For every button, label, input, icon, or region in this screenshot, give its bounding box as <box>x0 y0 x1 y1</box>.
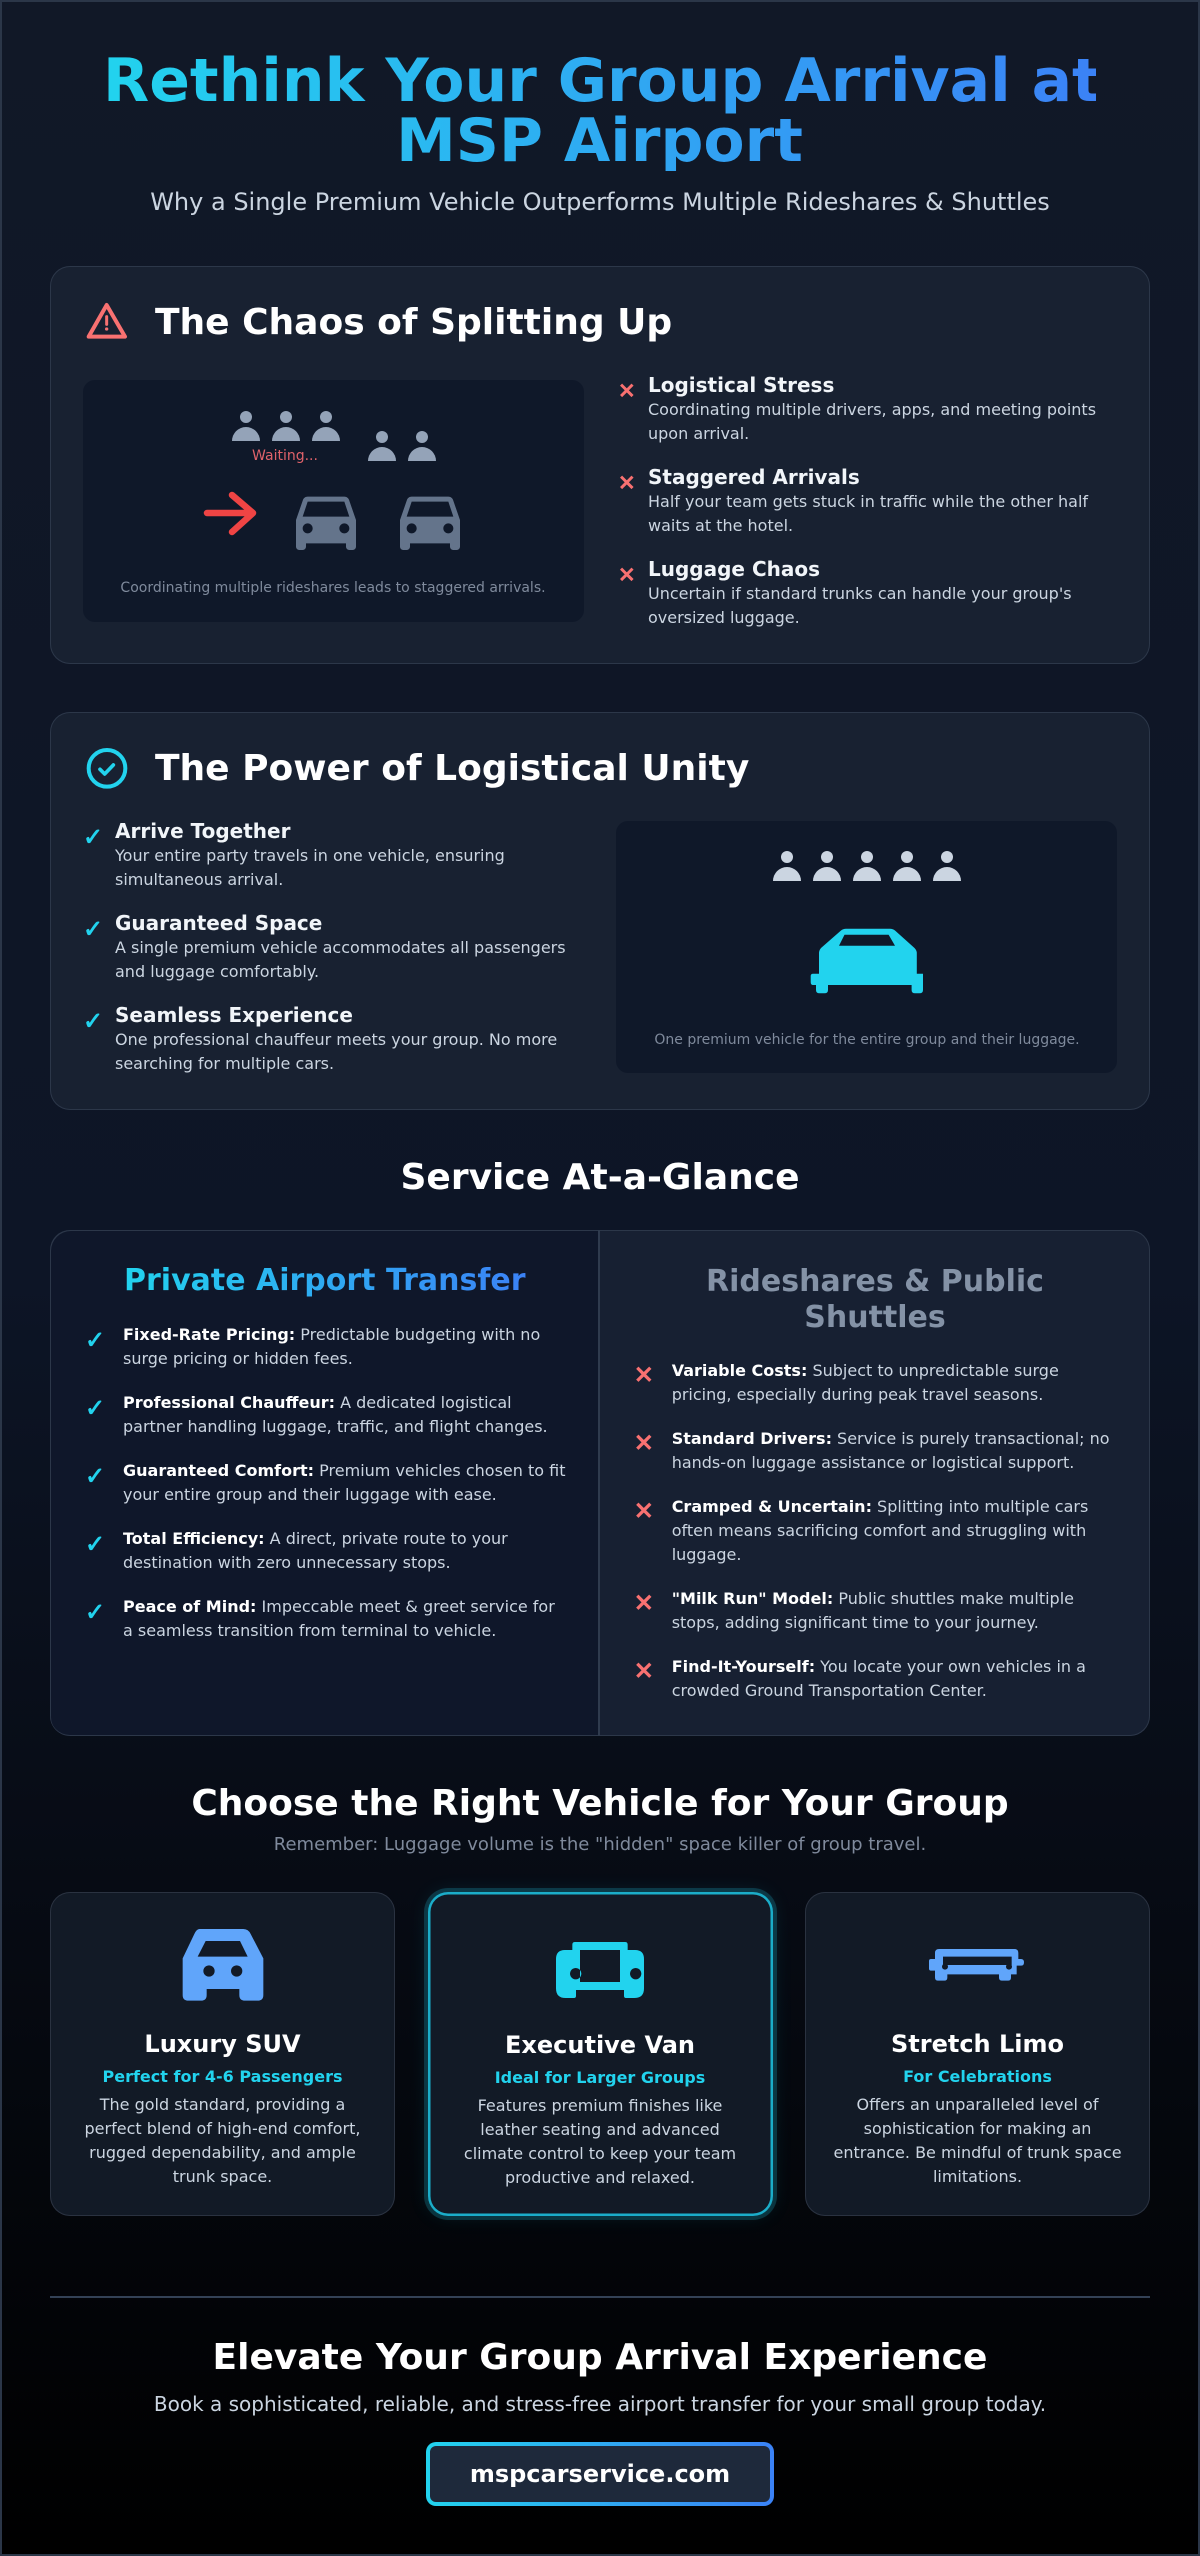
item: seamless experience <box>83 1003 557 1073</box>
heading: elevate your group arrival experience: Elevate Your Group Arrival Experience <box>213 2336 987 2378</box>
vehicle description: leather seating and advanced <box>480 2120 720 2139</box>
icon: suv <box>182 1929 264 2001</box>
row: peace of mind: a seamless transition from terminal to vehicle. <box>123 1620 496 1640</box>
item: staggered arrivals <box>618 465 1088 535</box>
vehicle description: entrance. Be mindful of trunk space <box>833 2143 1122 2162</box>
column: rideshares and public shuttles <box>634 1264 1110 1700</box>
vehicle description: Offers an unparalleled level of <box>857 2095 1098 2114</box>
row: peace of mind <box>85 1596 555 1640</box>
item: luggage chaos: Luggage Chaos <box>648 557 820 581</box>
vehicle description <box>464 2096 736 2187</box>
item: guaranteed space: A single premium vehicle accommodates all passengers <box>115 938 566 957</box>
row: fixed-rate pricing: surge pricing or hidden fees. <box>123 1348 353 1368</box>
subheading: luggage reminder: Remember: Luggage volume is the "hidden" space killer of group travel. <box>274 1834 926 1855</box>
item: staggered arrivals: Half your team gets stuck in traffic while the other half <box>648 492 1088 511</box>
item: luggage chaos <box>618 557 1072 627</box>
vehicle description: The gold standard, providing a <box>100 2095 345 2114</box>
panel: the chaos of splitting up: ✕ <box>618 471 636 495</box>
vehicle description: trunk space. <box>173 2167 272 2186</box>
column: private airport transfer: ✓ <box>85 1530 105 1558</box>
row: cramped and uncertain: Cramped & Uncertain: Splitting into multiple cars <box>672 1496 1088 1516</box>
row: variable costs: pricing, especially during peak travel seasons. <box>672 1384 1043 1404</box>
item: staggered arrivals: Staggered Arrivals <box>648 465 860 489</box>
title <box>103 51 1096 171</box>
heading: unity: The Power of Logistical Unity <box>155 748 749 788</box>
row: find-it-yourself <box>634 1656 1086 1700</box>
column heading: rideshares <box>706 1264 1044 1335</box>
illustration: one premium vehicle <box>616 821 1117 1073</box>
item: seamless experience: searching for multiple cars. <box>115 1054 334 1073</box>
vehicle name: Executive Van <box>505 2031 695 2059</box>
card: luxury suv <box>50 1892 395 2216</box>
footer text: Book a sophisticated, reliable, and stress-free airport transfer for your small group today. <box>154 2392 1046 2416</box>
panel: the chaos of splitting up: ✕ <box>618 379 636 403</box>
row: standard drivers <box>634 1428 1110 1472</box>
vehicle description: perfect blend of high-end comfort, <box>85 2119 360 2138</box>
row: variable costs: Variable Costs: Subject to unpredictable surge <box>672 1360 1059 1380</box>
call to action button <box>426 2442 774 2506</box>
icon: limo <box>929 1949 1024 1981</box>
row: guaranteed comfort <box>85 1460 566 1504</box>
item: guaranteed space <box>83 911 566 981</box>
icon: van <box>556 1942 644 1998</box>
row: milk run model <box>634 1588 1074 1632</box>
row: cramped and uncertain <box>634 1496 1088 1564</box>
item: luggage chaos: Uncertain if standard trunks can handle your group's <box>648 584 1072 603</box>
panel: the power of logistical unity: ✓ <box>83 915 103 943</box>
row: professional chauffeur <box>85 1392 548 1436</box>
panel: the chaos of splitting up <box>50 266 1150 664</box>
footer divider <box>50 2296 1150 2298</box>
item: seamless experience: One professional chauffeur meets your group. No more <box>115 1030 557 1049</box>
row: variable costs <box>634 1360 1059 1404</box>
vehicle description <box>85 2095 360 2186</box>
item: seamless experience: Seamless Experience <box>115 1003 353 1027</box>
panel: the chaos of splitting up: ✕ <box>618 563 636 587</box>
row: total efficiency: destination with zero unnecessary stops. <box>123 1552 451 1572</box>
column heading: rideshares: Shuttles <box>804 1300 946 1335</box>
column: rideshares and public shuttles: ✕ <box>634 1588 654 1616</box>
item: logistical stress: Logistical Stress <box>648 373 834 397</box>
heading: choose the right vehicle: Choose the Right Vehicle for Your Group <box>191 1782 1009 1824</box>
column heading: rideshares: Rideshares & Public <box>706 1264 1044 1299</box>
row: guaranteed comfort: your entire group and their luggage with ease. <box>123 1484 497 1504</box>
item: staggered arrivals: waits at the hotel. <box>648 516 793 535</box>
card: executive van <box>428 1892 772 2216</box>
row: milk run model: stops, adding significant time to your journey. <box>672 1612 1039 1632</box>
row: standard drivers: hands-on luggage assistance or logistical support. <box>672 1452 1074 1472</box>
heading: service at-a-glance: Service At-a-Glance <box>400 1156 800 1198</box>
card: stretch limo <box>805 1892 1150 2216</box>
item: logistical stress <box>618 373 1096 443</box>
vehicle description: sophistication for making an <box>864 2119 1091 2138</box>
row: guaranteed comfort: Guaranteed Comfort: Premium vehicles chosen to fit <box>123 1460 565 1480</box>
panel: the power of logistical unity: ✓ <box>83 1007 103 1035</box>
column: rideshares and public shuttles: ✕ <box>634 1360 654 1388</box>
row: cramped and uncertain: often means sacrificing comfort and struggling with <box>672 1520 1086 1540</box>
item: luggage chaos: oversized luggage. <box>648 608 800 627</box>
row: peace of mind: Peace of Mind: Impeccable meet & greet service for <box>123 1596 555 1616</box>
column: private airport transfer: ✓ <box>85 1326 105 1354</box>
vehicle name: Luxury SUV <box>144 2030 301 2058</box>
item: arrive together <box>83 819 505 889</box>
column: private airport transfer: ✓ <box>85 1394 105 1422</box>
panel: the power of logistical unity <box>50 712 1150 1110</box>
row: fixed-rate pricing: Fixed-Rate Pricing: Predictable budgeting with no <box>123 1324 540 1344</box>
icon: warning triangle <box>86 302 128 339</box>
row: milk run model: "Milk Run" Model: Public shuttles make multiple <box>672 1588 1074 1608</box>
icon: check circle <box>86 748 128 789</box>
vehicle description <box>833 2095 1122 2186</box>
row: professional chauffeur: Professional Chauffeur: A dedicated logistical <box>123 1392 512 1412</box>
row: cramped and uncertain: luggage. <box>672 1544 741 1564</box>
vehicle description: limitations. <box>933 2167 1022 2186</box>
column: rideshares and public shuttles: ✕ <box>634 1496 654 1524</box>
column: private airport transfer: ✓ <box>85 1598 105 1626</box>
column: rideshares and public shuttles: ✕ <box>634 1656 654 1684</box>
row: standard drivers: Standard Drivers: Service is purely transactional; no <box>672 1428 1110 1448</box>
row: total efficiency <box>85 1528 508 1572</box>
item: logistical stress: upon arrival. <box>648 424 749 443</box>
column: private airport transfer: ✓ <box>85 1462 105 1490</box>
vehicle description: Features premium finishes like <box>478 2096 722 2115</box>
illustration: multiple rideshares: Coordinating multiple rideshares leads to staggered arrivals. <box>120 580 546 596</box>
item: guaranteed space: Guaranteed Space <box>115 911 322 935</box>
row: find-it-yourself: Find-It-Yourself: You locate your own vehicles in a <box>672 1656 1086 1676</box>
item: logistical stress: Coordinating multiple drivers, apps, and meeting points <box>648 400 1096 419</box>
column: rideshares and public shuttles: ✕ <box>634 1428 654 1456</box>
item: arrive together: Your entire party travels in one vehicle, ensuring <box>115 846 505 865</box>
row: fixed-rate pricing <box>85 1324 540 1368</box>
panel: the power of logistical unity: ✓ <box>83 823 103 851</box>
title: MSP Airport <box>396 106 803 176</box>
vehicle tag: For Celebrations <box>903 2066 1052 2086</box>
illustration: multiple rideshares <box>83 380 584 622</box>
row: total efficiency: Total Efficiency: A direct, private route to your <box>123 1528 508 1548</box>
title: Rethink Your Group Arrival at <box>103 46 1101 116</box>
illustration: one premium vehicle: One premium vehicle for the entire group and their luggage. <box>654 1032 1080 1048</box>
call to action button: mspcarservice.com <box>470 2460 730 2488</box>
heading: chaos: The Chaos of Splitting Up <box>155 302 672 342</box>
row: find-it-yourself: crowded Ground Transportation Center. <box>672 1680 987 1700</box>
item: arrive together: Arrive Together <box>115 819 290 843</box>
column heading: private airport transfer: Private Airport Transfer <box>124 1263 526 1298</box>
column: private airport transfer <box>50 1230 600 1736</box>
item: guaranteed space: and luggage comfortably. <box>115 962 319 981</box>
vehicle name: Stretch Limo <box>891 2030 1064 2058</box>
illustration: multiple rideshares: Waiting... <box>252 448 318 464</box>
comparison table <box>50 1230 1150 1736</box>
vehicle tag: Ideal for Larger Groups <box>495 2068 705 2086</box>
row: professional chauffeur: partner handling luggage, traffic, and flight changes. <box>123 1416 548 1436</box>
item: arrive together: simultaneous arrival. <box>115 870 283 889</box>
subtitle: Why a Single Premium Vehicle Outperforms Multiple Rideshares & Shuttles <box>150 188 1050 216</box>
vehicle description: rugged dependability, and ample <box>89 2143 356 2162</box>
vehicle tag: Perfect for 4-6 Passengers <box>102 2066 342 2086</box>
vehicle description: climate control to keep your team <box>464 2144 736 2163</box>
vehicle description: productive and relaxed. <box>505 2168 695 2187</box>
